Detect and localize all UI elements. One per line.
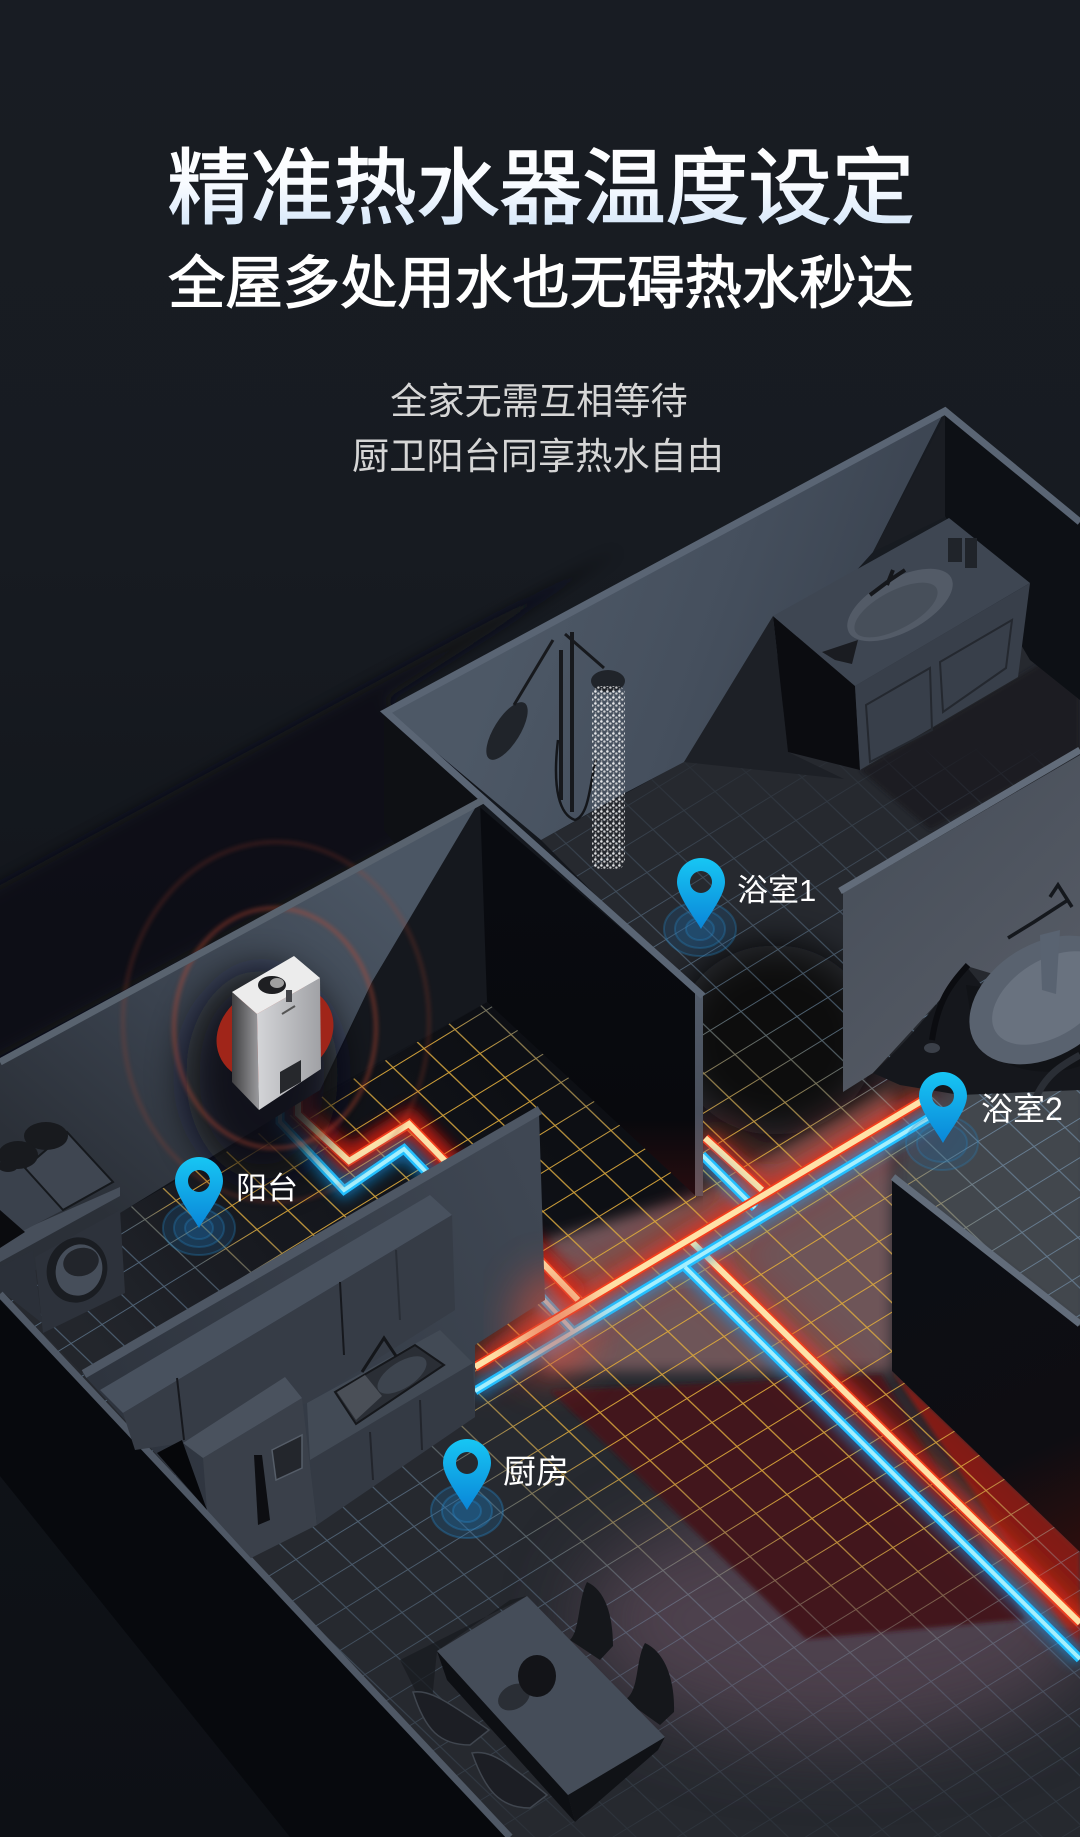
wall rims: [386, 411, 1080, 996]
panel: bathroom 2 wall: [840, 750, 1080, 1095]
description line 2: 厨卫阳台同享热水自由: [352, 435, 724, 477]
water heater: [232, 956, 321, 1110]
chair 4: [472, 1752, 547, 1808]
panel: kitchen wall: [82, 1110, 590, 1558]
floor grid: warm: [131, 1006, 1054, 1640]
chair 2: [625, 1643, 674, 1725]
dark niche: [157, 1440, 207, 1510]
basin: [836, 554, 964, 656]
counter door lines: [370, 1400, 422, 1480]
rim: [84, 1110, 540, 1374]
partition face: [843, 755, 1080, 1092]
rim: [840, 750, 1080, 891]
dark wall face: [474, 802, 697, 1197]
cold water pipes: [280, 1090, 1080, 1659]
right wall inner face: [945, 409, 1080, 700]
panel: bathroom 1 walls: [384, 409, 1080, 1197]
washer front: [35, 1210, 125, 1333]
table shadow: [400, 1596, 527, 1720]
floor: bathroom 2: [893, 1050, 1080, 1340]
floor: bathroom 1 dark zone: [860, 640, 1080, 830]
wall face: [0, 803, 480, 1294]
door lines: [177, 1250, 400, 1440]
location: balcony: [163, 1157, 298, 1255]
rail: [561, 632, 572, 812]
shower head: [591, 670, 625, 692]
water stream: [592, 686, 625, 869]
wall shadow: [320, 800, 487, 1095]
left side: [773, 616, 860, 770]
shadow: [478, 696, 536, 766]
laundry sink: [25, 1132, 113, 1210]
wall shadow triangle: [873, 416, 947, 552]
title: 精准热水器温度设定: [168, 142, 914, 235]
faucet: [870, 570, 905, 595]
front: [257, 978, 321, 1110]
panels: [866, 620, 1012, 762]
location: bathroom 2: [906, 1072, 1063, 1170]
dark niche: [0, 1210, 25, 1248]
fridge front: [203, 1398, 317, 1558]
floor: red strip by wall: [892, 1371, 1080, 1650]
panel: balcony wall: [0, 800, 487, 1294]
wall face: [82, 1113, 545, 1558]
table legs side: [568, 1737, 665, 1822]
wall rim: [0, 800, 483, 1062]
location: bathroom 1: [664, 858, 816, 956]
upper cabinet top: [100, 1195, 452, 1413]
floor: hallway dark zone: [675, 945, 875, 1135]
soap dish: [822, 640, 858, 664]
top: [232, 956, 320, 1014]
red heat glow on balcony: [298, 1082, 578, 1300]
bottles: [948, 538, 977, 568]
floor: warm wash: [545, 1090, 892, 1371]
shower: [478, 632, 625, 869]
centre plant: [518, 1655, 556, 1697]
fridge top: [183, 1377, 302, 1458]
flue: [258, 976, 292, 1002]
back wall face: [388, 410, 945, 840]
location: balcony: 阳台: [236, 1171, 298, 1206]
panel: lower right dark wall: [892, 1177, 1080, 1552]
chair 1: [570, 1582, 613, 1660]
floor plan base: [0, 620, 1080, 1837]
floor: lower warm glow: [580, 1500, 1080, 1740]
panel: outer left wall: [0, 1294, 510, 1837]
arm: [514, 634, 604, 705]
hot water pipes: [298, 1082, 1080, 1623]
tub shadow: [873, 966, 1080, 1095]
hot water main: [475, 1099, 925, 1367]
base cabinet: [0, 1250, 42, 1323]
location: kitchen: 厨房: [503, 1453, 569, 1490]
counter top: [307, 1330, 473, 1460]
location: kitchen: [431, 1439, 569, 1538]
red heat glow on floor: [475, 1099, 1080, 1623]
control panel: [280, 1060, 301, 1094]
counter slab: [0, 1187, 120, 1262]
floor grid: cool: [11, 768, 1080, 1837]
subtitle: 全屋多处用水也无碍热水秒达: [168, 252, 914, 316]
floor: balcony: [43, 1002, 703, 1373]
counter top: [0, 1167, 63, 1243]
cast shadow on ground: [0, 550, 620, 1120]
top: [773, 518, 1030, 686]
upper cabinet front: [123, 1215, 455, 1450]
fridge dispenser: [272, 1435, 302, 1480]
chair 3: [413, 1692, 489, 1745]
shadow around water heater: [186, 970, 338, 1180]
location: bathroom 2: 浴室2: [981, 1091, 1063, 1127]
red disc: [201, 966, 349, 1100]
icon: bathtub: [924, 885, 1080, 1100]
vanity: [773, 518, 1030, 770]
dining table set: [400, 1582, 674, 1822]
fridge handle: [254, 1455, 270, 1525]
brand mark: [282, 1006, 295, 1014]
description line 1: 全家无需互相等待: [390, 380, 688, 422]
table side: [437, 1651, 575, 1822]
left side: [232, 992, 259, 1110]
vanity cast shadow: [684, 616, 844, 779]
kitchen cabinets: [100, 1195, 475, 1558]
wall glow: [514, 1270, 590, 1380]
plant: [0, 1122, 68, 1172]
outer dark side: [384, 716, 480, 850]
floor: wall shadow: [551, 1375, 1026, 1639]
washer door: [38, 1229, 116, 1311]
plant shadow: [493, 1678, 535, 1716]
location: bathroom 1: 浴室1: [737, 873, 816, 908]
heat ring inner: [174, 908, 376, 1148]
washing machine and laundry unit: [0, 1122, 125, 1333]
wall end strip: [695, 990, 703, 1196]
counter front: [310, 1363, 475, 1525]
heat ring outer: [123, 842, 429, 1202]
sink: [335, 1338, 444, 1424]
table top: [437, 1596, 665, 1795]
front: [855, 583, 1030, 770]
hose: [556, 740, 596, 820]
